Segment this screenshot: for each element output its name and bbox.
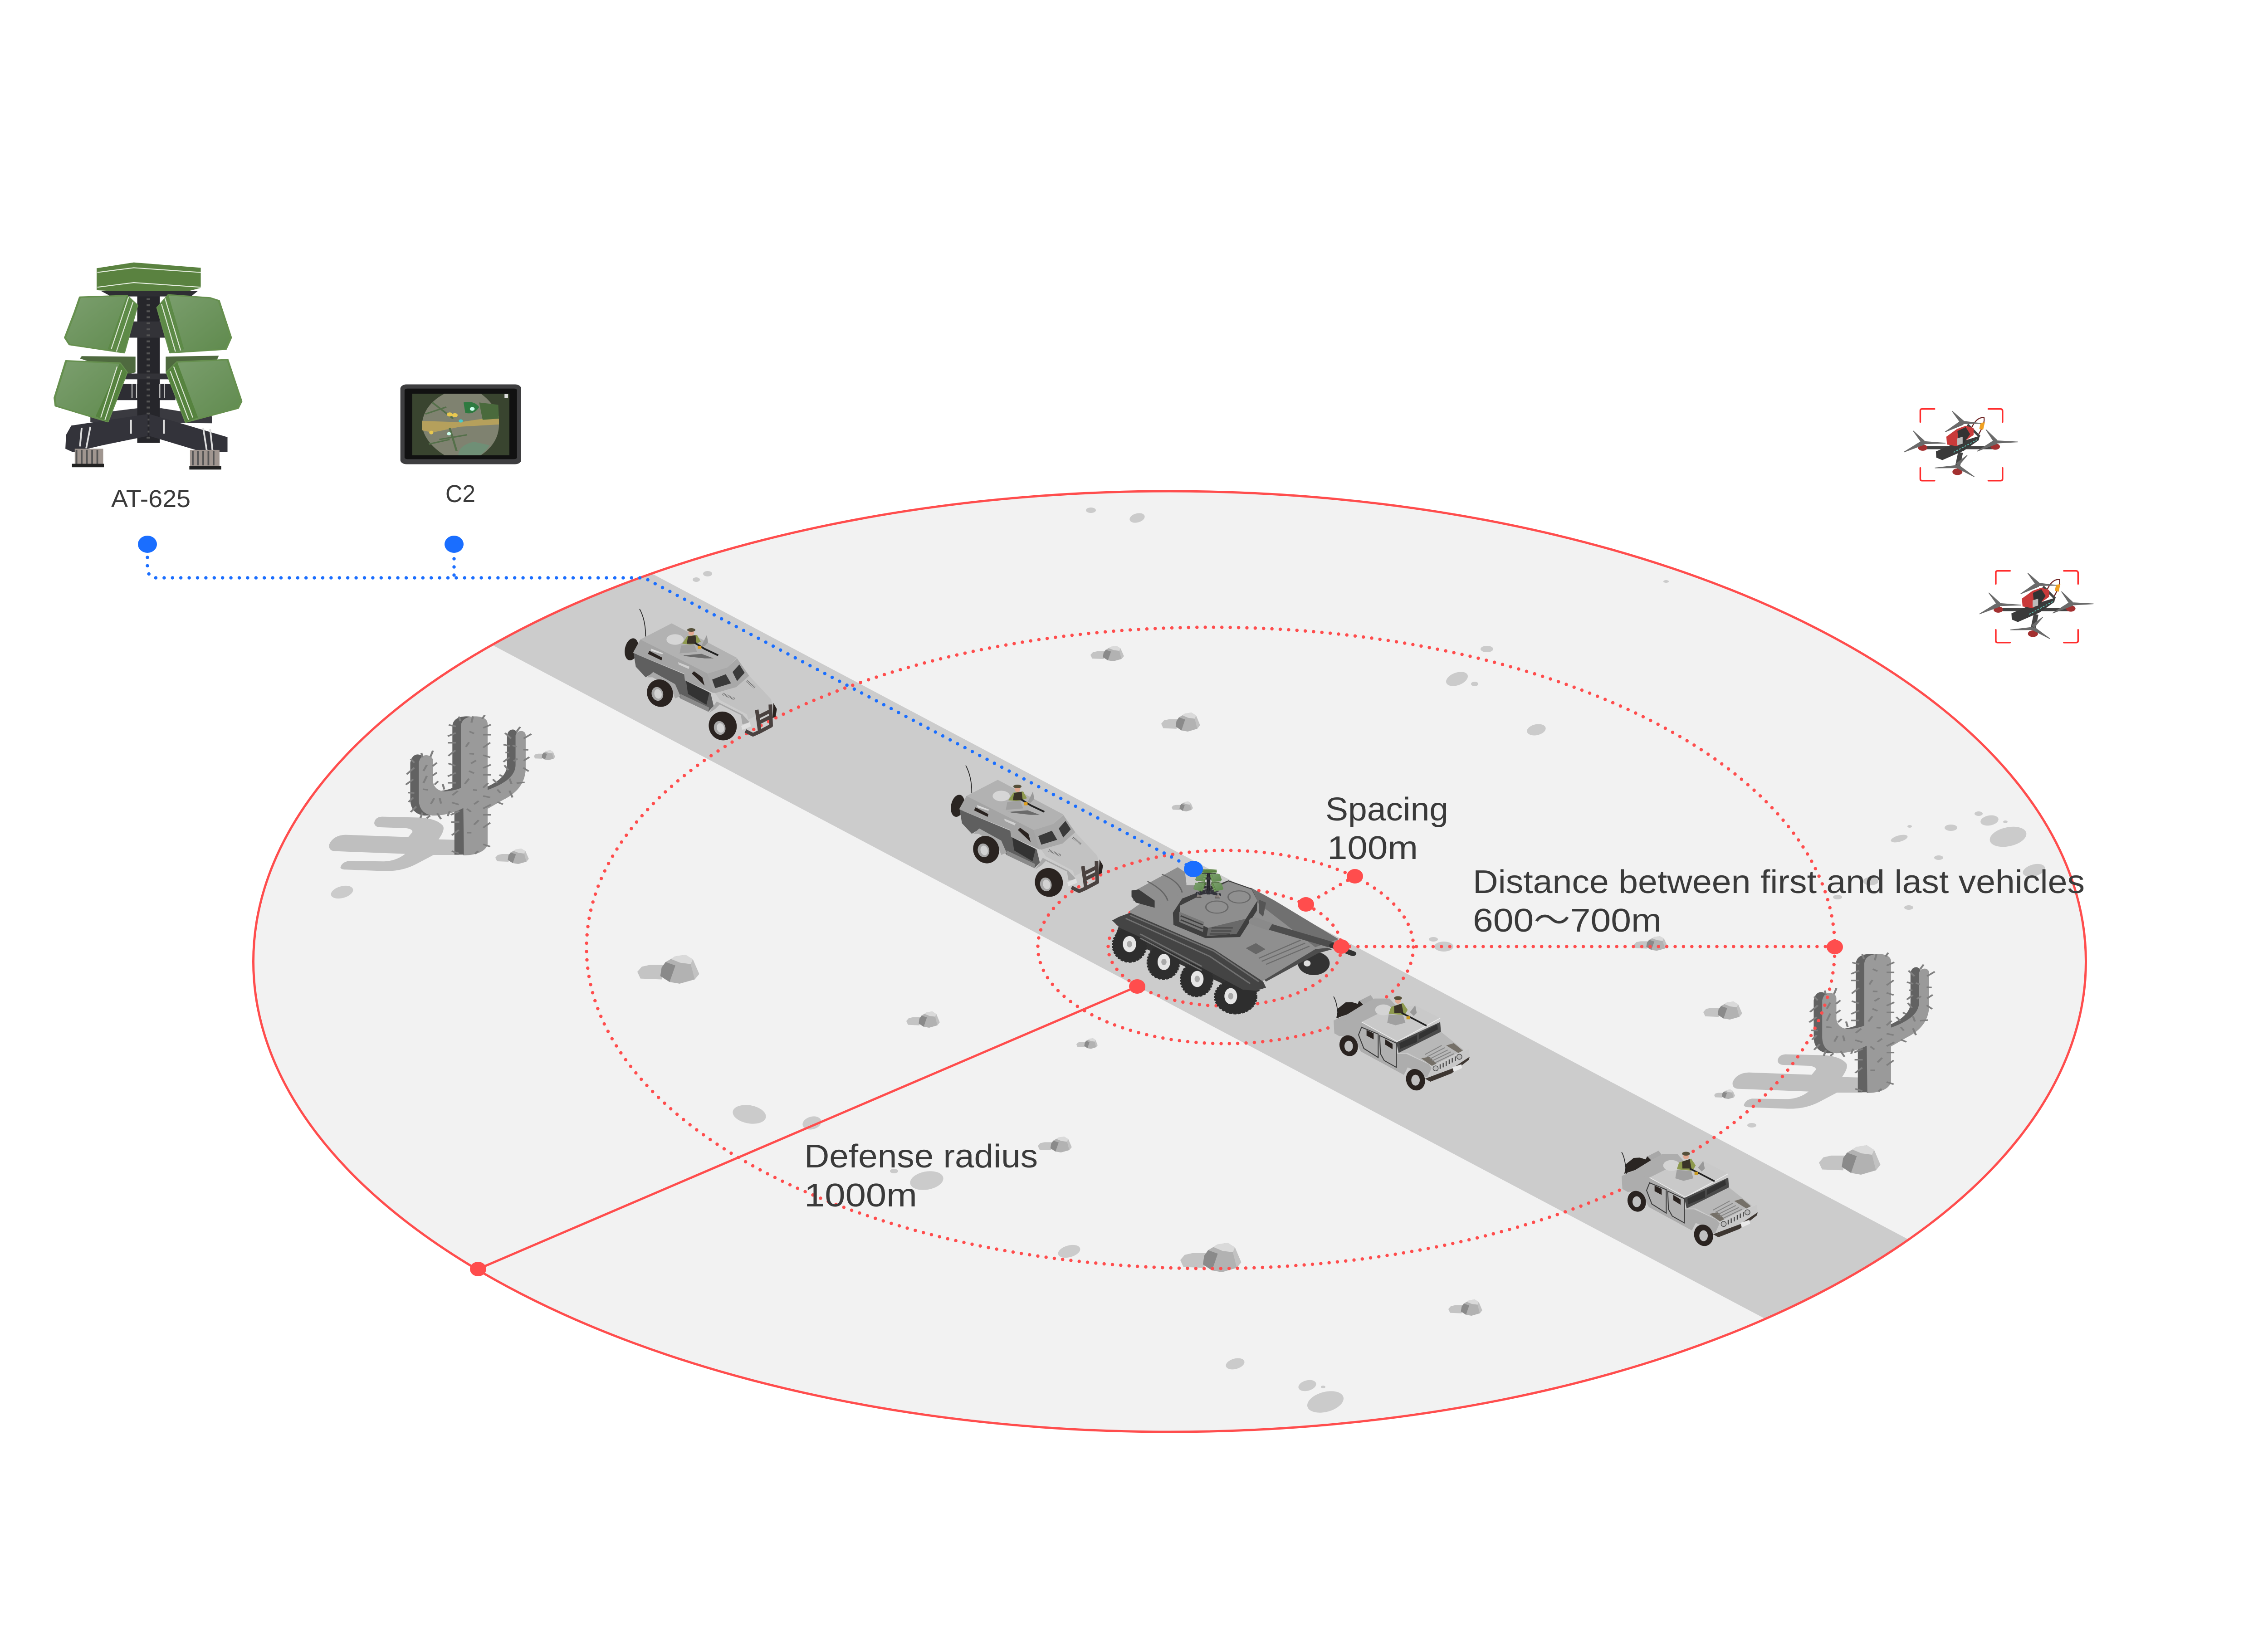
icon: target drone 1: [1904, 409, 2018, 481]
label: C2: C2: [445, 480, 475, 508]
icon: left cactus: [329, 715, 531, 871]
callout: defense radius: Defense radius: [804, 1138, 1038, 1175]
dotted leader: spacing: [1306, 876, 1355, 904]
armored vehicle 2: [949, 766, 1103, 902]
blue dotted link: AT-625 to tank: [147, 557, 1191, 867]
humvee 2: [1622, 1151, 1758, 1249]
red marker: first vehicle point: [1333, 939, 1349, 954]
label: AT-625: AT-625: [111, 485, 191, 513]
panel: defense zone ground ellipse: [253, 491, 2086, 1432]
solid leader: defense radius: [478, 986, 1137, 1269]
callout: spacing: Spacing: [1325, 791, 1448, 828]
scattered rocks: [329, 508, 2047, 1416]
callout: spacing: 100m: [1327, 830, 1418, 866]
icon: C2 tablet: [401, 385, 521, 464]
callout: distance between first and last vehicles: Distance between first and last vehicles: [1473, 864, 2085, 900]
callout: spacing: [1325, 791, 1448, 866]
armored vehicle 1: [623, 609, 777, 745]
callout: distance between first and last vehicles: 600～700m: [1473, 903, 1662, 939]
lead tank with AT-625 mounted: [1112, 867, 1353, 1014]
dotted leader: first to last vehicle distance: [1341, 945, 1835, 948]
dotted ring: vehicle footprint inner: [1108, 888, 1341, 1006]
icon: right cactus: [1733, 953, 1935, 1109]
callout: defense radius: [804, 1138, 1038, 1214]
humvee 1: [1334, 995, 1470, 1093]
blue node: AT-625: [138, 536, 157, 553]
red marker: spacing label point: [1347, 869, 1363, 884]
dotted ring: 600-700m convoy coverage: [587, 627, 1835, 1269]
red marker: radius end: [470, 1262, 486, 1276]
road band: [494, 574, 1907, 1318]
icon: AT-625 radar device: [54, 263, 241, 469]
outer defense radius circle: [253, 491, 2086, 1432]
icon: target drone 2: [1980, 571, 2093, 643]
red marker: radius start: [1129, 979, 1145, 994]
callout: defense radius: 1000m: [804, 1177, 917, 1214]
red marker: last vehicle point: [1827, 940, 1843, 954]
blue node on tank: [1184, 861, 1203, 877]
dotted ring: spacing 100m outer: [1038, 850, 1413, 1044]
callout: distance between first and last vehicles: [1473, 864, 2085, 939]
blue dotted link: C2 drop: [452, 559, 456, 577]
red marker: spacing ring point: [1298, 897, 1314, 912]
blue node: C2: [445, 536, 464, 553]
